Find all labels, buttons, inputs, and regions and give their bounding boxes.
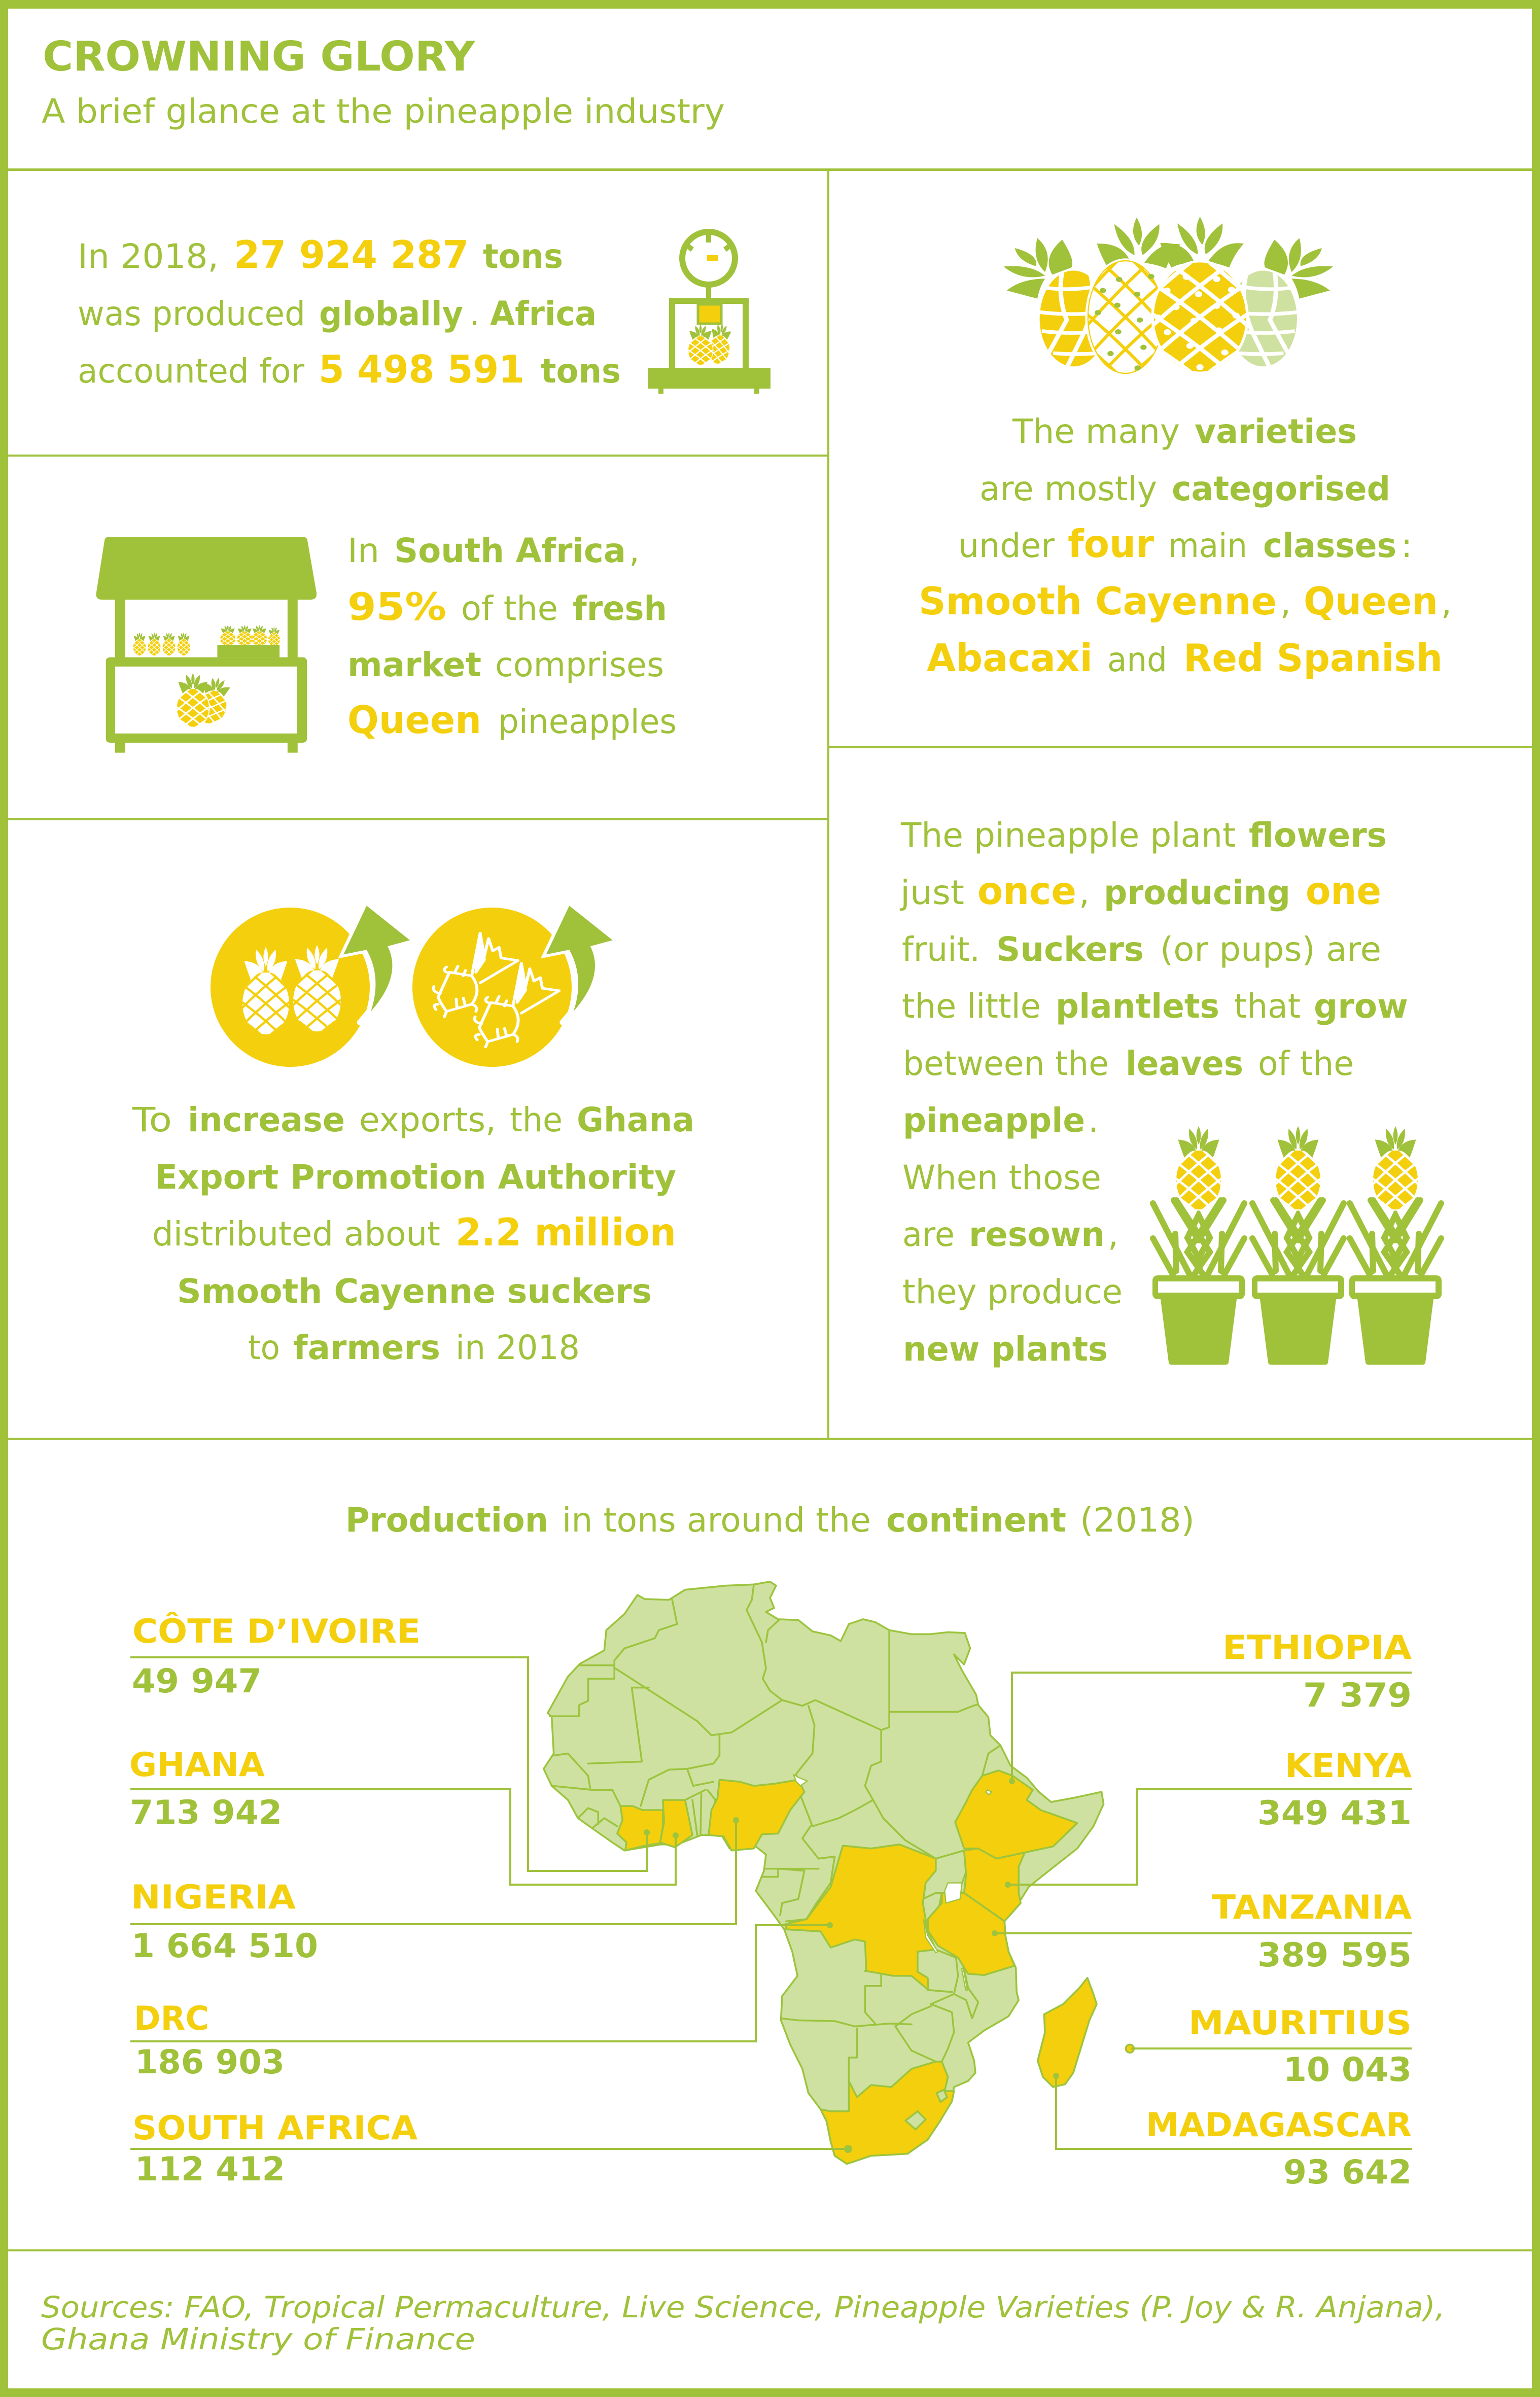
leader: Ethiopia: ETHIOPIA <box>1222 1629 1412 1667</box>
market text <box>347 531 677 742</box>
suckers text: flowers <box>1249 816 1387 855</box>
suckers text: are <box>902 1215 955 1254</box>
leader: Ghana: GHANA <box>129 1746 265 1784</box>
icon: pineapples in circle with arrow <box>211 906 410 1083</box>
leader: Côte d'Ivoire <box>130 1612 650 1871</box>
suckers text: The pineapple plant <box>900 816 1236 855</box>
leader: DRC <box>130 1922 833 2081</box>
suckers text: grow <box>1314 987 1408 1026</box>
leader: Mauritius: 10 043 <box>1283 2051 1412 2089</box>
Ghana text: in 2018 <box>456 1328 580 1367</box>
varieties text: categorised <box>1172 469 1390 508</box>
varieties text <box>919 412 1452 680</box>
leader: Nigeria: NIGERIA <box>131 1879 296 1917</box>
market text: of the <box>461 589 558 628</box>
Ghana text: to <box>248 1328 280 1367</box>
panel: fresh market <box>96 531 677 756</box>
leader: Madagascar: MADAGASCAR <box>1146 2106 1412 2144</box>
leader: Mauritius: MAURITIUS <box>1188 2004 1412 2042</box>
suckers text: , <box>1079 873 1090 912</box>
suckers text: of the <box>1258 1044 1354 1083</box>
icon: suckers in circle with arrow <box>412 906 613 1067</box>
Ghana text: Export Promotion Authority <box>155 1158 676 1197</box>
suckers text: between the <box>903 1044 1109 1083</box>
leader: Kenya: KENYA <box>1285 1747 1412 1785</box>
varieties text: classes <box>1263 526 1396 565</box>
leader: DRC: 186 903 <box>135 2043 285 2081</box>
leader: South Africa: SOUTH AFRICA <box>132 2109 417 2147</box>
suckers text: one <box>1306 869 1381 913</box>
production text: tons <box>483 237 563 276</box>
Ghana text: 2.2 million <box>456 1210 676 1255</box>
sources: Ghana Ministry of Finance <box>41 2322 475 2356</box>
production text: 5 498 591 <box>319 347 524 392</box>
panel: Ghana exports <box>132 906 694 1367</box>
Ghana text: To <box>132 1100 172 1139</box>
header <box>42 33 725 131</box>
varieties text: are mostly <box>979 469 1157 508</box>
production text: In 2018, <box>78 237 219 276</box>
icon: potted pineapple plants <box>1152 1108 1442 1365</box>
leader: Kenya: 349 431 <box>1257 1794 1412 1832</box>
leader: Tanzania: 389 595 <box>1257 1936 1412 1974</box>
Ghana text: exports, <box>359 1100 496 1139</box>
Ghana text: Ghana <box>577 1100 694 1139</box>
Ghana text <box>132 1100 694 1367</box>
suckers text: once <box>977 869 1076 913</box>
production text: globally <box>319 294 463 333</box>
leader: Ghana <box>129 1746 679 1885</box>
panel: suckers <box>899 816 1442 1369</box>
varieties text: Abacaxi <box>927 636 1093 680</box>
varieties text: main <box>1168 526 1247 565</box>
suckers text: resown <box>969 1215 1105 1254</box>
production text: accounted for <box>78 352 305 391</box>
leader: Nigeria <box>130 1817 739 1965</box>
varieties text: Smooth Cayenne <box>919 579 1277 623</box>
varieties text: Queen <box>1304 579 1438 623</box>
map heading <box>345 1501 1195 1540</box>
suckers text: producing <box>1104 873 1290 912</box>
suckers text: (or pups) are <box>1160 930 1381 969</box>
leader: Côte d'Ivoire: CÔTE D’IVOIRE <box>132 1612 421 1651</box>
suckers text: the little <box>902 987 1041 1026</box>
leader: Nigeria: 1 664 510 <box>131 1927 318 1965</box>
sources: Sources: FAO, Tropical Permaculture, Live Science, Pineapple Varieties (P. Joy & R. Anjana), <box>41 2290 1445 2324</box>
varieties text: , <box>1280 583 1291 622</box>
Ghana text: the <box>510 1100 563 1139</box>
varieties text: , <box>1441 583 1452 622</box>
map heading: in tons around the <box>562 1501 871 1540</box>
leader: DRC: DRC <box>134 2000 209 2038</box>
panel: production map <box>129 1501 1412 2192</box>
leader: Côte d'Ivoire: 49 947 <box>132 1662 262 1700</box>
Ghana text: farmers <box>293 1328 440 1367</box>
leader: Madagascar <box>1053 2073 1412 2192</box>
leader: Tanzania <box>992 1889 1412 1974</box>
Ghana text: Smooth Cayenne suckers <box>177 1272 652 1311</box>
varieties text: and <box>1107 640 1167 679</box>
title: CROWNING GLORY <box>43 33 475 80</box>
suckers text: that <box>1234 987 1301 1026</box>
suckers text: When those <box>902 1158 1101 1197</box>
leader: Ethiopia: 7 379 <box>1303 1677 1412 1715</box>
suckers text: fruit. <box>902 930 980 969</box>
suckers text: plantlets <box>1056 987 1219 1026</box>
varieties text: four <box>1068 522 1154 566</box>
leader: Kenya <box>1005 1747 1412 1888</box>
Ghana text: distributed about <box>152 1214 440 1254</box>
production text <box>78 232 621 392</box>
panel: varieties <box>919 181 1452 680</box>
suckers text: just <box>899 873 964 912</box>
market text: market <box>347 645 481 684</box>
icon: market stall <box>96 537 317 756</box>
country borders <box>550 1584 1000 2111</box>
suckers text: leaves <box>1126 1044 1243 1083</box>
market text: In <box>347 531 379 570</box>
leader: Tanzania: TANZANIA <box>1212 1889 1412 1927</box>
leader: South Africa <box>130 2109 852 2188</box>
varieties text: The many <box>1012 412 1180 451</box>
sources <box>41 2290 1445 2356</box>
icon: weighing scale <box>648 232 771 394</box>
suckers text: they produce <box>902 1272 1123 1311</box>
highlighted countries <box>617 1806 663 1851</box>
production text: Africa <box>490 294 597 333</box>
market text: fresh <box>573 589 667 628</box>
subtitle: A brief glance at the pineapple industry <box>42 92 725 131</box>
market text: 95% <box>347 584 446 629</box>
suckers text: . <box>1088 1101 1099 1140</box>
suckers text: Suckers <box>996 930 1144 969</box>
leader: Ethiopia <box>1009 1629 1412 1784</box>
map heading: continent <box>886 1501 1066 1540</box>
panel: global production <box>78 232 771 394</box>
production text: 27 924 287 <box>234 232 469 277</box>
icon: four pineapples <box>1003 217 1333 374</box>
production text: . <box>469 294 480 333</box>
market text: Queen <box>347 698 481 742</box>
market text: pineapples <box>498 702 677 741</box>
market text: comprises <box>495 645 664 684</box>
production text: tons <box>541 352 621 391</box>
suckers text <box>899 816 1408 1369</box>
production text: was produced <box>78 294 305 333</box>
leader: South Africa: 112 412 <box>135 2150 285 2188</box>
leader: Ghana: 713 942 <box>130 1794 282 1832</box>
suckers text: , <box>1108 1215 1118 1254</box>
suckers text: new plants <box>903 1330 1108 1369</box>
leader: Madagascar: 93 642 <box>1283 2153 1412 2192</box>
suckers text: pineapple <box>903 1101 1085 1140</box>
varieties text: : <box>1401 526 1412 565</box>
Ghana text: increase <box>188 1100 345 1139</box>
varieties text: varieties <box>1195 412 1357 451</box>
map heading: (2018) <box>1080 1501 1195 1540</box>
varieties text: Red Spanish <box>1183 636 1443 680</box>
map heading: Production <box>345 1501 548 1540</box>
map of Africa <box>544 1582 1134 2164</box>
varieties text: under <box>958 526 1055 565</box>
market text: , <box>629 531 640 570</box>
leader: Mauritius <box>1131 2004 1412 2089</box>
enclaves and lakes <box>905 2111 926 2130</box>
market text: South Africa <box>394 531 626 570</box>
